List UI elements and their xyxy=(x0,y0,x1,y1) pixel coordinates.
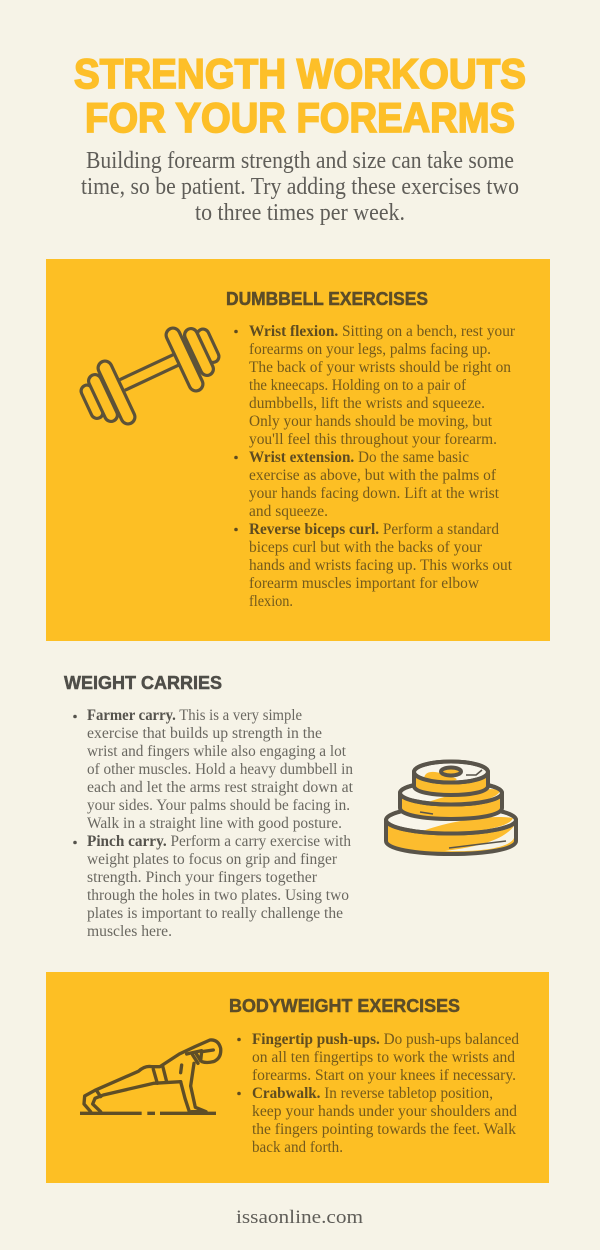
panel: dumbbell exercises xyxy=(46,259,550,641)
intro text: Building forearm strength and size can take some xyxy=(86,148,514,174)
exercise list: dumbbell: Wrist flexion. Sitting on a bench, rest your xyxy=(249,323,516,340)
exercise list: dumbbell: biceps curl but with the backs of your xyxy=(249,539,483,556)
exercise list: dumbbell: hands and wrists facing up. This works out xyxy=(249,557,513,574)
exercise list: dumbbell: Only your hands should be moving, but xyxy=(249,413,493,430)
title: STRENGTH WORKOUTS xyxy=(74,50,526,97)
exercise list: weight carries: each and let the arms rest straight down at xyxy=(87,779,354,796)
panel: weight carries xyxy=(64,673,516,940)
intro text: time, so be patient. Try adding these exercises two xyxy=(81,174,519,200)
exercise list: weight carries: muscles here. xyxy=(87,923,172,940)
exercise list: dumbbell: forearm muscles important for elbow xyxy=(249,575,480,592)
heading: bodyweight exercises: BODYWEIGHT EXERCISES xyxy=(229,996,460,1016)
exercise list: dumbbell: Wrist extension. Do the same basic xyxy=(249,449,469,466)
exercise list: weight carries: Farmer carry. This is a very simple xyxy=(87,707,302,724)
exercise list: weight carries: of other muscles. Hold a heavy dumbbell in xyxy=(87,761,353,778)
title: FOR YOUR FOREARMS xyxy=(85,94,515,141)
heading: dumbbell exercises: DUMBBELL EXERCISES xyxy=(226,289,428,309)
exercise list: dumbbell: your hands facing down. Lift at the wrist xyxy=(249,485,500,502)
exercise list: dumbbell: forearms on your legs, palms facing up. xyxy=(249,341,491,358)
exercise list: dumbbell: dumbbells, lift the wrists and squeeze. xyxy=(249,395,485,412)
exercise list: weight carries: exercise that builds up strength in the xyxy=(87,725,322,742)
exercise list: weight carries: wrist and fingers while also engaging a lot xyxy=(87,743,347,760)
exercise list: bodyweight: forearms. Start on your knees if necessary. xyxy=(252,1067,516,1084)
exercise list: weight carries: plates is important to really challenge the xyxy=(87,905,343,922)
exercise list: weight carries: Walk in a straight line with good posture. xyxy=(87,815,342,832)
exercise list: weight carries: your sides. Your palms should be facing in. xyxy=(87,797,350,814)
heading: weight carries: WEIGHT CARRIES xyxy=(64,673,222,693)
exercise list: weight carries: through the holes in two plates. Using two xyxy=(87,887,349,904)
icon: dumbbell xyxy=(87,335,213,417)
exercise list: dumbbell: the kneecaps. Holding on to a pair of xyxy=(249,377,467,394)
exercise list: dumbbell: flexion. xyxy=(249,593,293,610)
exercise list: bodyweight xyxy=(237,1031,519,1156)
exercise list: weight carries: weight plates to focus on grip and finger xyxy=(87,851,338,868)
exercise list: bodyweight: the fingers pointing towards the feet. Walk xyxy=(252,1121,516,1138)
exercise list: bodyweight: Crabwalk. In reverse tabletop position, xyxy=(252,1085,493,1102)
exercise list: bodyweight: keep your hands under your shoulders and xyxy=(252,1103,517,1120)
exercise list: dumbbell: Reverse biceps curl. Perform a standard xyxy=(249,521,499,538)
title xyxy=(74,50,526,141)
exercise list: dumbbell: you'll feel this throughout your forearm. xyxy=(249,431,497,448)
source footer: issaonline.com xyxy=(236,1207,363,1228)
exercise list: dumbbell: The back of your wrists should be right on xyxy=(249,359,511,376)
exercise list: bodyweight: back and forth. xyxy=(252,1139,343,1156)
icon: push-up figure xyxy=(80,1040,221,1113)
exercise list: weight carries xyxy=(73,707,354,940)
exercise list: dumbbell: exercise as above, but with the palms of xyxy=(249,467,497,484)
exercise list: dumbbell xyxy=(234,323,516,610)
exercise list: weight carries: strength. Pinch your fingers together xyxy=(87,869,318,886)
icon: weight plates xyxy=(386,762,516,854)
exercise list: bodyweight: Fingertip push-ups. Do push-ups balanced xyxy=(252,1031,519,1048)
exercise list: dumbbell: and squeeze. xyxy=(249,503,328,520)
exercise list: bodyweight: on all ten fingertips to work the wrists and xyxy=(252,1049,515,1066)
exercise list: weight carries: Pinch carry. Perform a carry exercise with xyxy=(87,833,351,850)
panel: bodyweight exercises xyxy=(46,972,549,1183)
intro text: to three times per week. xyxy=(195,200,405,226)
intro text xyxy=(81,148,519,226)
